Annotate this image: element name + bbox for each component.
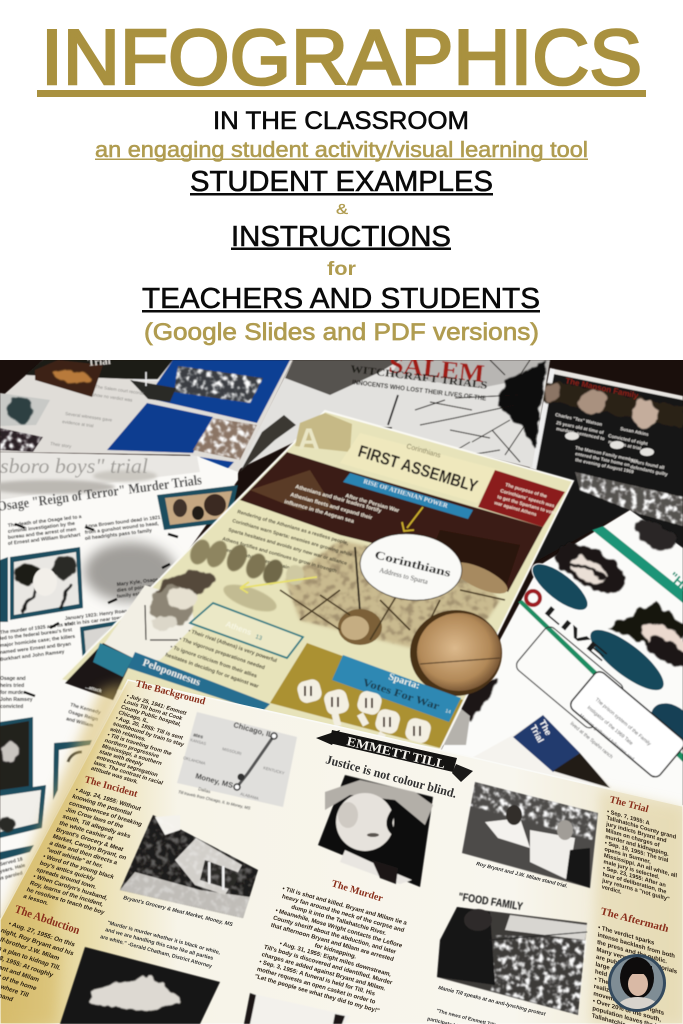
pale text section: Corinthians warn Sparta: enemies are growing while — [231, 518, 353, 558]
heading: The Background: The Background — [134, 678, 207, 708]
photo: Mamie Till at rally — [437, 891, 587, 1015]
photo strip — [575, 472, 683, 526]
gray text lines: evidence at trial — [62, 419, 94, 428]
photo: route map: OKLAHOMA — [183, 755, 206, 766]
card text: The prison system of the Family — [594, 697, 652, 747]
text: aftermath timeline: realize the — [594, 983, 624, 998]
note: versions: (Google Slides and PDF versions) — [144, 319, 539, 346]
small timeline text: Osage and — [0, 676, 26, 682]
heading: instructions: INSTRUCTIONS — [231, 221, 451, 253]
card text: Manson gathered followers and — [578, 713, 635, 763]
text: abduction timeline: • Aug. 27, 1955: On this — [7, 921, 77, 948]
quote: murder is murder: "Murder is murder whether it is black or white, — [106, 920, 221, 956]
heading: The Murder: The Murder — [330, 878, 385, 905]
panel: Salem witchcraft trials sheet — [237, 351, 550, 472]
green stripes — [518, 526, 683, 762]
body text on brown: influence in the Aegean sea — [283, 499, 355, 525]
text: background timeline: • July 25, 1941: Emmett — [125, 693, 187, 717]
text: background timeline: with relatives. — [108, 727, 147, 743]
photo: route map: MISSOURI — [222, 746, 242, 756]
pale text section — [217, 509, 353, 575]
white timeline text: defendants guilty — [630, 464, 668, 477]
small timeline text: The Kennedy — [69, 702, 102, 716]
text: background timeline: • Aug. 20, 1955: Till is sent — [114, 716, 184, 741]
text: murder timeline: charges are added against Bryant and Milam. — [261, 952, 386, 993]
text: aftermath timeline: the press and the public. — [597, 939, 668, 965]
red note box — [478, 470, 565, 527]
red note box: to get the Spartans to vote — [496, 494, 557, 517]
card text — [569, 697, 652, 763]
blue banner: RISE OF ATHENIAN POWER — [362, 478, 449, 510]
connector word: for: for — [327, 259, 357, 280]
white timeline text: The Manson Family members — [575, 445, 639, 463]
photo: route map — [177, 712, 297, 811]
panel: Sparta votes for war: Votes For War — [361, 677, 441, 713]
text: incident timeline: spreads around town. — [35, 867, 98, 891]
sheet title: trial: Trial — [87, 355, 111, 369]
small timeline text: shot in his car near town — [65, 615, 124, 628]
heading: student examples: STUDENT EXAMPLES — [190, 166, 493, 198]
heading: teachers and students: TEACHERS AND STUDENTS — [142, 283, 540, 315]
pale text section: Sparta hesitates and avoids any new war or alliance — [227, 527, 348, 567]
text: incident timeline: he resolves to teach the boy — [25, 887, 106, 916]
blue band: Peloponnesus — [128, 652, 270, 712]
text: incident timeline: consequences of breaking — [68, 801, 143, 828]
small timeline text: from a gunshot wound to head, — [85, 521, 160, 536]
white timeline text: murders, sentenced to — [556, 426, 605, 441]
gray text lines: Their story — [50, 441, 72, 449]
photo: route map: KENTUCKY — [263, 765, 285, 776]
text: background timeline: Mississippi, a southern — [101, 744, 163, 767]
text: incident timeline: a lesson. — [22, 894, 50, 907]
small timeline text: The murder of 1925 and its trial — [0, 621, 74, 636]
text: incident timeline — [22, 787, 155, 923]
panel: green-striped portrait sheet — [440, 510, 683, 815]
text: murder timeline: • Till is shot and killed. Bryant and Milam tie a — [281, 886, 408, 927]
section label: Corinthians: Corinthians — [405, 443, 442, 460]
panel: Emmett Till sheet — [0, 678, 683, 1024]
small timeline text: Mary Kyle, Osage heir, 1923: — [117, 574, 185, 588]
photo: Mamie Till at rally: "FOOD FAMILY — [458, 891, 524, 913]
body text on brown: After the Persian War — [344, 493, 400, 515]
panel: Sparta votes for war: Sparta: — [387, 671, 421, 692]
faces row — [540, 380, 683, 428]
red note box: The purpose of the — [504, 482, 548, 500]
greek letter — [295, 413, 352, 452]
text: trial timeline: opens in Sumner, — [604, 847, 651, 866]
warrior art — [280, 590, 505, 645]
text: aftermath timeline: • The verdict sparks — [598, 924, 655, 947]
sheet tagline: INNOCENTS WHO LOST THEIR LIVES OF THE — [352, 379, 487, 403]
panel: Corinthians first assembly sheet: A — [298, 423, 320, 456]
photo: lower frame — [79, 620, 118, 656]
panel: Osage murder trials sheet — [0, 452, 238, 920]
subheading: engaging student activity: an engaging student activity/visual learning tool — [95, 137, 588, 162]
small timeline text: John Ramsey — [0, 697, 33, 703]
text: background timeline: Chicago, IL. — [117, 710, 150, 725]
small timeline text: January 1923: Henry Roan — [65, 608, 128, 622]
text: trial timeline: hour of deliberation, the — [602, 872, 666, 896]
white timeline text: 25 years old at time of — [556, 420, 604, 435]
text: aftermath timeline: Many very popular editorials — [596, 946, 678, 976]
quote: murder is murder — [99, 920, 221, 970]
photo: lower right building — [244, 993, 350, 1024]
white timeline text — [555, 412, 668, 477]
text: incident timeline: • Word of the young black — [42, 854, 115, 881]
text: trial timeline — [601, 809, 681, 911]
small timeline text: for murder — [0, 690, 25, 696]
small timeline text: oil headrights pass to family — [85, 528, 152, 542]
arrow: yellow down — [402, 507, 423, 531]
text: incident timeline: Roy, learns of the incident, — [29, 881, 105, 908]
lower text panel — [164, 628, 278, 690]
blue banner — [343, 473, 473, 519]
photo: lower frames — [0, 740, 92, 882]
sheet heading fragment: sboro boys" trial — [0, 454, 148, 478]
gray text lines — [50, 384, 145, 449]
small timeline text: convicted — [0, 704, 23, 710]
text: background timeline: attitude was stark. — [90, 766, 140, 786]
teal outlined box — [190, 603, 303, 658]
banner: Emmett Till: EMMETT TILL — [345, 733, 447, 772]
small timeline text: major homicide case; the killers — [0, 634, 76, 649]
small timeline text: Osage Reign — [67, 709, 99, 723]
text: background timeline: state with deeply — [98, 749, 145, 768]
lower text panel: • The vigorous preparations needed — [178, 636, 266, 671]
photo: route map: Money, MS — [194, 771, 234, 790]
statue head — [150, 566, 217, 629]
crowd silhouettes — [186, 536, 304, 617]
photo collage of printed student infographics — [0, 351, 683, 1024]
panel: blue trial sheet — [0, 355, 293, 473]
circle label: Corinthians address: Address to Sparta — [379, 566, 430, 586]
small timeline text: Burkhart and John Ramsey — [0, 649, 65, 663]
text: trial timeline: • Sep. 7, 1955: A — [607, 809, 650, 827]
small timeline text: Anna Brown found dead in 1921 — [85, 515, 161, 530]
text: background timeline: southbound by train to stay — [111, 721, 186, 748]
text: background timeline: entrenched segregation — [95, 755, 159, 779]
icon: raised fists — [296, 678, 433, 747]
teal outlined box: 13 — [254, 634, 263, 642]
text: aftermath timeline: • The verdict — [594, 976, 630, 992]
white timeline text: murders at trial — [608, 439, 642, 451]
photo: route map: ates — [192, 732, 204, 741]
text: murder timeline: dump it into the Tallahatchie River. — [290, 905, 387, 937]
caption: grocery: Bryant's Grocery & Meat Market, Money, MS — [123, 895, 234, 928]
photo: second bearded man — [607, 602, 683, 673]
quote ovals — [530, 562, 683, 740]
small timeline text — [0, 514, 161, 728]
banner: Emmett Till — [316, 730, 473, 782]
text: murder timeline: heavy fan around the neck of the corpse and — [281, 894, 405, 934]
lower text panel: • To ignore criticism from their allies — [169, 644, 258, 680]
header section — [37, 13, 646, 346]
red note box: war against Athens — [492, 500, 538, 518]
sheet subtitle: WITCHCRAFT TRIALS — [350, 364, 488, 392]
panel: The Trial mini sheet — [474, 714, 611, 788]
text: aftermath timeline: large and famous — [595, 961, 645, 982]
text: aftermath timeline — [592, 924, 679, 1024]
sheet title: The Manson Family — [565, 376, 640, 401]
white timeline text: Susan Atkins — [620, 426, 650, 437]
small timeline text: led to the federal bureau's first — [0, 627, 73, 642]
white timeline text: the evening of August 1969 — [575, 457, 635, 474]
photo: man in hat — [0, 717, 33, 795]
red ring — [526, 591, 540, 605]
parchment left staining — [0, 682, 128, 1024]
text: incident timeline: south, Till allegedly asks — [61, 814, 132, 840]
photo: route map: Chicago, IL — [232, 720, 274, 740]
small timeline text: dies of poison; inquest held — [117, 580, 183, 594]
background art band — [285, 540, 500, 660]
heading: The Abduction: The Abduction — [13, 903, 82, 937]
text: background timeline — [89, 693, 199, 793]
header box — [340, 433, 500, 503]
heading: first assembly: FIRST ASSEMBLY — [356, 442, 481, 496]
white timeline text: entered the Tate home on — [575, 451, 630, 468]
photo: group of men — [634, 518, 676, 552]
photo: trial defendants — [462, 782, 598, 888]
text: background timeline: Louis Till born at Cook — [122, 699, 184, 722]
circle label: Corinthians address — [357, 529, 465, 605]
heading: The Aftermath: The Aftermath — [599, 906, 670, 935]
text: incident timeline: Jim Crow laws of the — [64, 807, 125, 830]
gray text lines: show no verdict was — [92, 392, 133, 403]
text: incident timeline: boy's antics quickly — [38, 861, 96, 883]
text: background timeline: northern progressive — [103, 738, 160, 760]
panel: Sparta votes for war — [270, 643, 463, 748]
dark picture — [65, 643, 133, 700]
shield — [410, 610, 502, 696]
body text on brown — [283, 484, 400, 525]
spear — [355, 547, 362, 637]
heading: The Trial: The Trial — [608, 794, 650, 815]
text: background timeline: laws. The contrast in racial — [92, 760, 164, 787]
text: trial timeline: • Sep. 19, 1955: The trial — [605, 840, 669, 864]
pale text section: Rendering of the Athenians as a restless people, — [236, 509, 350, 547]
quote: murder is murder: and we are handling this case like all parties — [104, 927, 214, 962]
title rule — [37, 90, 646, 97]
white timeline text: Charles "Tex" Watson — [555, 412, 603, 427]
parchment right staining — [590, 790, 683, 1024]
white timeline text: Convicted of eight — [608, 433, 648, 446]
text: incident timeline: • Aug. 24, 1955: Without — [74, 787, 142, 812]
quote: murder is murder: are white." -Gerald Chatham, District Attorney — [99, 934, 212, 970]
text: trial timeline: jury returns a "not guilty" — [601, 878, 670, 903]
photo: route map: KANSAS — [190, 737, 207, 746]
photo: bearded man — [553, 542, 626, 594]
photo: route map: ALABAMA — [240, 791, 260, 801]
card text: Instigator of the 1969 Tate — [586, 705, 634, 747]
text: trial timeline: verdict. — [601, 884, 622, 896]
small timeline text: family estate goes to Hale — [117, 587, 178, 600]
small timeline text: of Ernest and William Burkhart — [8, 532, 81, 547]
panel: black timeline sheet — [520, 368, 683, 570]
text: trial timeline: Milam on charges of — [606, 828, 660, 849]
panel: Corinthians first assembly sheet — [60, 411, 573, 750]
text: incident timeline: Market, Carolyn Bryant, on — [51, 834, 127, 862]
text: murder timeline: Till's body is discovered and identified. Murder — [263, 945, 393, 987]
text: trial timeline: jury indicts Bryant and — [605, 821, 667, 845]
text: murder timeline: • Sep. 3, 1955: A funeral is held for Till. His — [258, 959, 376, 998]
text: aftermath timeline: movement for civil rights — [593, 990, 665, 1017]
quote card — [514, 624, 626, 731]
pale text section: Athens fortifies and continues to grow in strength — [221, 536, 337, 575]
text: murder timeline: mother requests an open casket in order to — [256, 967, 376, 1006]
small timeline text: bureau and the arrest of men — [8, 527, 77, 541]
text: murder timeline: that afternoon Bryant and Milam are arrested — [270, 923, 395, 963]
photo: portrait frames — [0, 547, 83, 622]
text: murder timeline: for kidnapping. — [314, 943, 357, 961]
text: incident timeline: the white cashier at — [58, 821, 114, 842]
circle label: Corinthians address: Corinthians — [373, 549, 453, 580]
photo: Emmett Till portrait — [318, 775, 433, 887]
panel: The Trial mini sheet: The — [537, 718, 554, 737]
text: murder timeline: "Let the people see what they did to my boy!" — [254, 974, 380, 1015]
heading: in the classroom: IN THE CLASSROOM — [213, 107, 469, 135]
dark picture: ...attack — [85, 684, 103, 693]
small timeline text: heirs tried — [0, 683, 24, 689]
text: abduction timeline: night, Roy Bryant and his — [0, 927, 75, 957]
small timeline text: criminal investigation by the — [8, 521, 75, 535]
text: aftermath timeline: held and others are — [595, 968, 651, 991]
small timeline text: The death of the Osage led to a — [8, 514, 82, 529]
text: murder timeline: • Aug. 31, 1955: Eight miles downstream, — [279, 941, 392, 978]
heading: The Incident: The Incident — [83, 774, 139, 800]
card text: lived at the Spahn ranch — [569, 721, 614, 760]
lower text panel: • Their rival (Athens) is very powerful — [187, 628, 278, 664]
ampersand: & — [336, 201, 348, 218]
text: murder timeline — [254, 886, 412, 1016]
panel: Sparta votes for war: 14 — [444, 708, 452, 716]
text: aftermath timeline: • Over 20% of the south, — [593, 998, 661, 1024]
text: trial timeline: Tallahatchie County grand — [606, 815, 677, 841]
text: incident timeline: a date and then directs a — [48, 841, 119, 867]
gray text lines: Several witnesses gave — [65, 411, 113, 423]
photo: abduction house — [60, 947, 220, 1024]
text: incident timeline: knowing the potential — [71, 794, 133, 817]
red note box: Corinthians' speech was — [499, 488, 555, 509]
body text on brown: Athenian fleets and expand their — [289, 492, 374, 522]
white statue background — [100, 585, 195, 660]
photo: route map: Till travels from Chicago, IL to Money, MS — [178, 789, 251, 811]
text: incident timeline: "wolf whistle" at her. — [45, 847, 104, 870]
text: aftermath timeline: intense backlash from both — [597, 931, 675, 960]
author avatar — [608, 954, 666, 1017]
tree — [415, 360, 546, 462]
text: murder timeline: • Meanwhile, Mose Wright contacts the Leflore — [274, 908, 403, 950]
text: trial timeline: • Sep. 23, 1955: After an — [603, 865, 666, 889]
tagline: Justice is not colour blind. — [324, 752, 458, 801]
text: incident timeline: Bryant's Grocery & Meat — [55, 827, 124, 853]
gray text lines: The Salem court records — [95, 384, 145, 396]
text: background timeline: • Till is traveling from the — [106, 732, 173, 757]
small timeline text: and William — [65, 716, 94, 729]
small timeline text: named were Ernest and Bryan — [0, 641, 71, 656]
text: trial timeline: murder and kidnapping. — [605, 834, 669, 858]
photo: family — [157, 485, 238, 530]
photo: Bryant's grocery — [120, 815, 258, 918]
large word fragments: LIVE — [541, 602, 611, 664]
lower text panel: hesitates in deciding for or against war — [164, 652, 259, 690]
sheet title: Osage: Osage "Reign of Terror" Murder Trials — [0, 473, 203, 515]
text: abduction timeline — [0, 907, 79, 1024]
blue band: Peloponnesus: Peloponnesus — [141, 657, 202, 689]
text: incident timeline: • When Carolyn's husband, — [32, 874, 109, 902]
text: trial timeline: Mississippi. An all white, all — [604, 853, 678, 880]
photo: route map: Dallas — [198, 786, 212, 794]
text: trial timeline: male jury is selected. — [603, 859, 660, 881]
caption: Mamie Till: Mamie Till speaks at an anti-lynching protest — [438, 985, 546, 1018]
text: background timeline: County Public hospital, — [120, 705, 182, 728]
caption: trial: Roy Bryant and J.W. Milam stand trial. — [476, 861, 568, 890]
brown band — [240, 452, 543, 592]
body text on brown: Athenians and their leaders fortify — [294, 484, 383, 515]
arrow: yellow pointer — [240, 577, 317, 593]
pale text section: Athenians, while others remain idle — [217, 545, 300, 574]
white timeline text: Jurors found all — [630, 458, 665, 470]
text: aftermath timeline: are published in — [596, 953, 642, 973]
teal outlined box: Athens — [224, 619, 253, 637]
text: murder timeline: County sheriff about the abduction, and later — [272, 915, 397, 956]
title: INFOGRAPHICS: INFOGRAPHICS — [41, 13, 642, 101]
panel: The Trial mini sheet: Trial — [528, 723, 546, 744]
sheet title: Salem: SALEM — [387, 351, 486, 388]
